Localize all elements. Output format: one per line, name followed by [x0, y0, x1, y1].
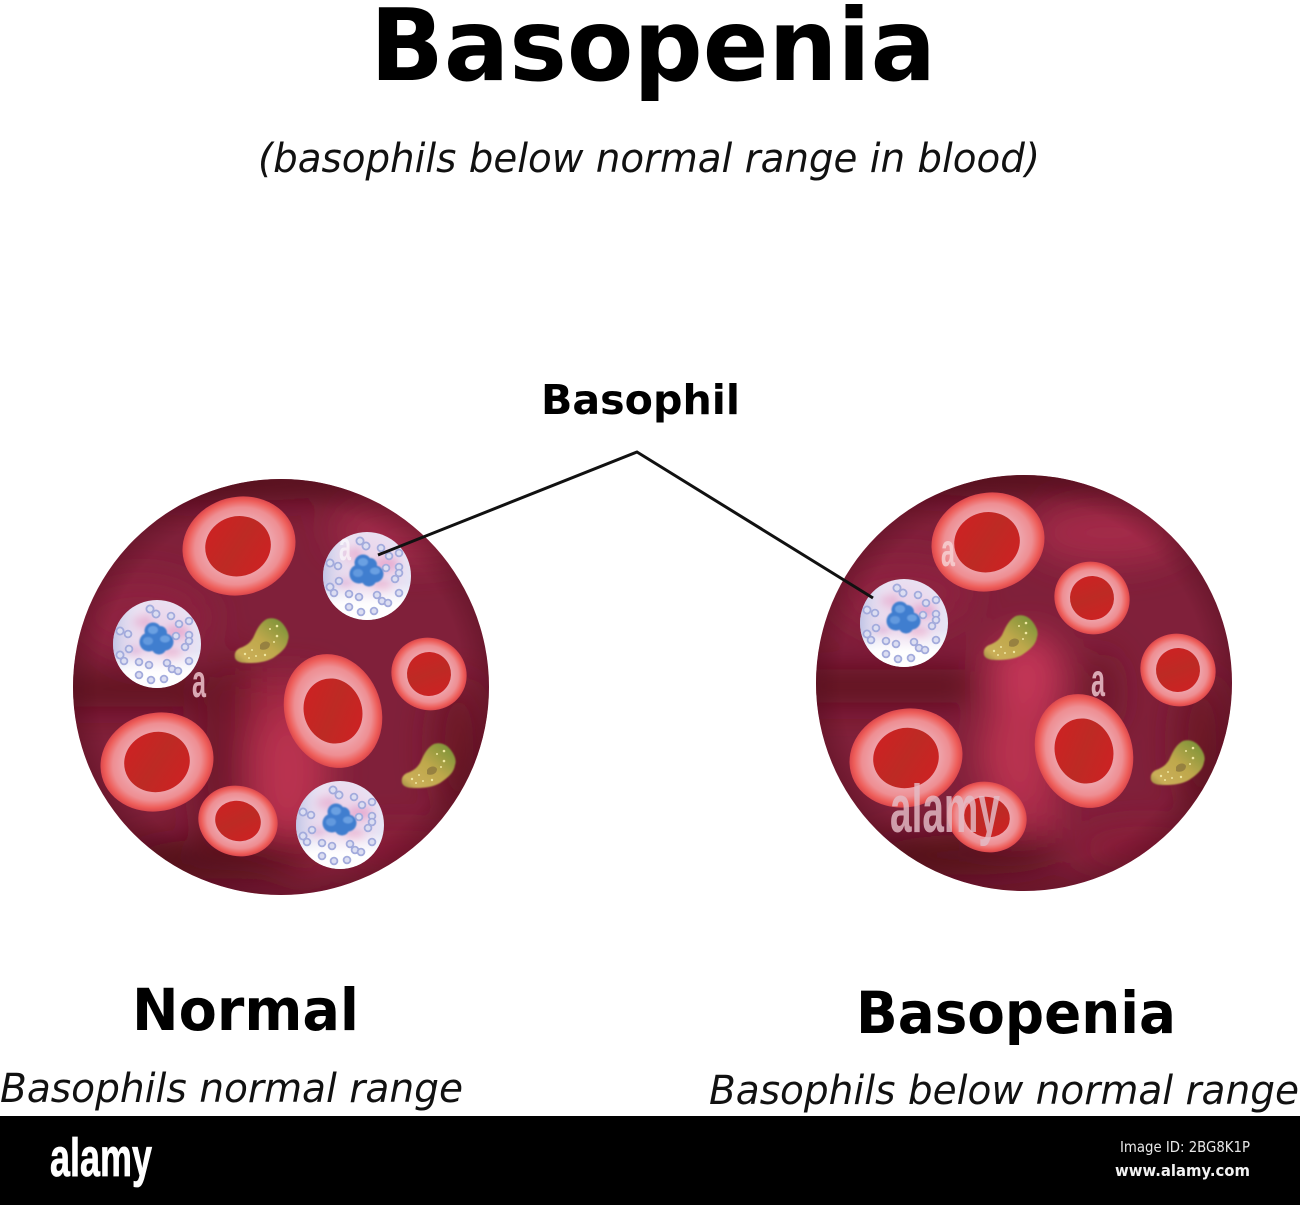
red blood cell 5: [190, 777, 286, 865]
label: Basophil: Basophil: [541, 376, 740, 424]
red blood cell 1: [171, 484, 307, 608]
circle background: basopenia: [794, 461, 1232, 891]
caption: normal: Basophils normal range: [0, 1066, 463, 1112]
platelet 2: [402, 743, 456, 788]
red blood cell 6: [939, 773, 1035, 861]
panel: basopenia blood circle: [794, 461, 1232, 891]
circle background: normal: [51, 465, 491, 895]
watermark letter: a: [192, 655, 206, 707]
platelet 2: [1151, 740, 1205, 785]
heading: Basopenia: Basopenia: [856, 979, 1176, 1047]
basophil: [860, 579, 948, 667]
red blood cell 5: [838, 696, 974, 820]
footer logo: alamy: [50, 1128, 152, 1188]
red blood cell 4: [89, 700, 225, 824]
red blood cell 2: [268, 640, 398, 782]
footer bar: [0, 1116, 1300, 1205]
pointer lines from label to basophils: [378, 452, 873, 598]
website: www.alamy.com: [1115, 1161, 1250, 1180]
red blood cell 1: [920, 480, 1056, 604]
basophil 2: [113, 600, 201, 688]
platelet 1: [235, 618, 289, 663]
red blood cell 2: [1042, 549, 1142, 647]
watermark letter: a: [1091, 654, 1105, 706]
caption: basopenia: Basophils below normal range: [709, 1068, 1299, 1114]
red blood cell 4: [1019, 680, 1149, 822]
watermark letter on basophil: a: [339, 525, 351, 569]
red blood cell 3: [379, 625, 479, 723]
watermark word: alamy: [890, 771, 1000, 847]
basophil 1: [323, 532, 411, 620]
watermark letter on red cell: a: [941, 524, 955, 576]
panel: normal blood circle: [51, 465, 491, 895]
heading: Normal: Normal: [132, 976, 359, 1044]
platelet 1: [984, 615, 1038, 660]
subtitle: (basophils below normal range in blood): [258, 136, 1040, 182]
image id: Image ID: 2BG8K1P: [1120, 1138, 1250, 1156]
basophil 3: [296, 781, 384, 869]
red blood cell 3: [1128, 621, 1228, 719]
